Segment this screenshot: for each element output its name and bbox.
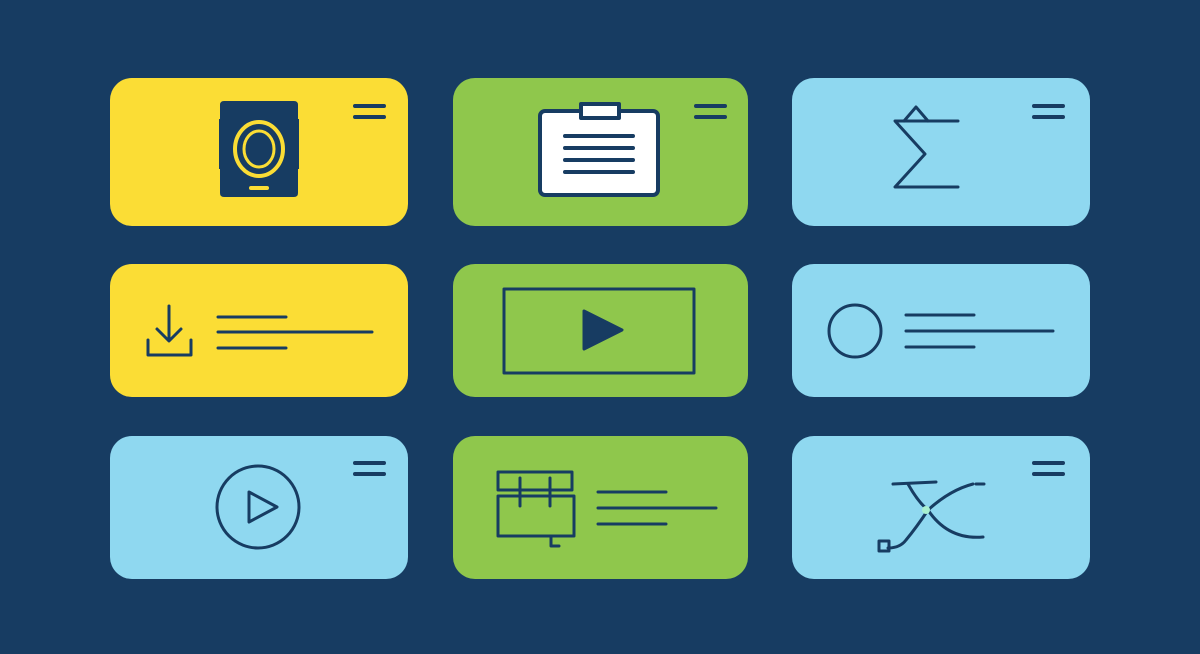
icon: sigma [895, 107, 958, 187]
text lines [598, 492, 716, 524]
icon: calendar [498, 472, 574, 546]
text lines [218, 317, 372, 348]
icon: download [148, 306, 191, 355]
icon: video player [504, 289, 694, 373]
card: video [453, 264, 748, 397]
text lines [906, 315, 1053, 347]
card: curve [792, 436, 1090, 579]
card: sigma [792, 78, 1090, 226]
card: phone [110, 78, 408, 226]
card: calendar [453, 436, 748, 579]
card: play [110, 436, 408, 579]
icon: circle [829, 305, 881, 357]
icon: menu [1034, 463, 1063, 474]
icon: play circle [217, 466, 299, 548]
icon: menu [696, 106, 725, 117]
icon: menu [355, 106, 384, 117]
card: clipboard [453, 78, 748, 226]
icon: menu [1034, 106, 1063, 117]
card: download [110, 264, 408, 397]
card: circle [792, 264, 1090, 397]
icon: phone [219, 101, 299, 197]
icon: clipboard [540, 104, 658, 195]
icon: bezier curve [879, 482, 984, 551]
icon: menu [355, 463, 384, 474]
